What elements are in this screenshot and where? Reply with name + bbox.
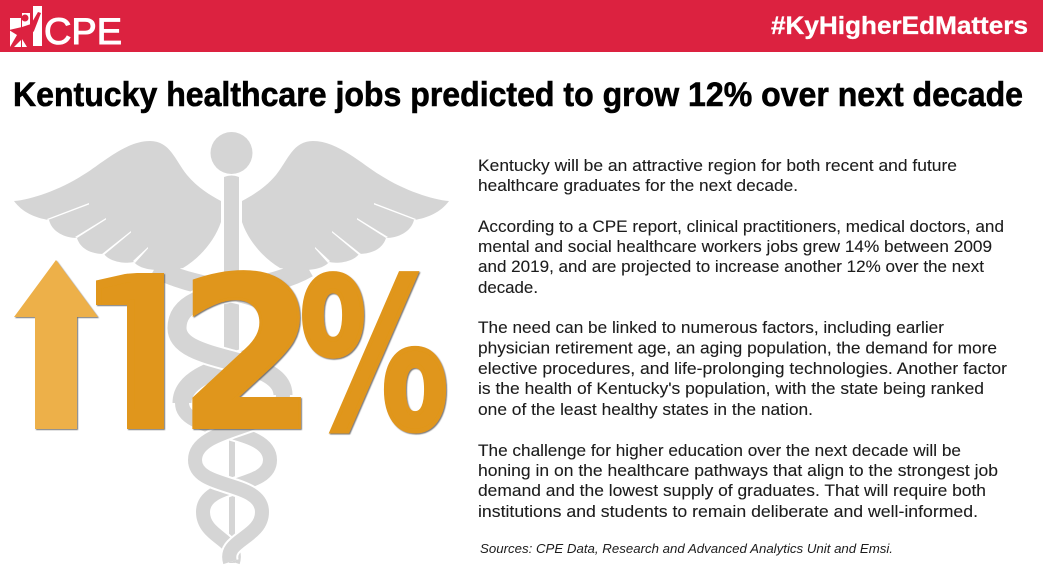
logo: CPE xyxy=(9,6,122,52)
paragraph 3: one of the least healthy states in the nation. xyxy=(478,401,813,419)
arrow: up xyxy=(14,260,98,429)
left wing xyxy=(14,141,221,270)
hashtag: #KyHigherEdMatters xyxy=(771,12,1028,40)
paragraph 4: The challenge for higher education over the next decade will be xyxy=(478,442,961,460)
paragraph 3 xyxy=(478,319,1008,419)
logo wordmark: CPE xyxy=(44,11,122,52)
right wing xyxy=(242,141,449,270)
paragraph 4: institutions and students to remain deliberate and well-informed. xyxy=(478,503,978,521)
icon: caduceus xyxy=(14,132,449,563)
snakes xyxy=(155,268,308,562)
paragraph 2 xyxy=(478,218,1004,297)
icon: logo columns with figure xyxy=(9,6,42,47)
paragraph 1: Kentucky will be an attractive region for both recent and future xyxy=(478,157,957,175)
paragraph 1: healthcare graduates for the next decade. xyxy=(478,177,798,195)
paragraph 2: decade. xyxy=(478,279,538,297)
paragraph 3: physician retirement age, an aging population, the demand for more xyxy=(478,340,997,358)
paragraph 3: is the health of Kentucky's population, with the state being ranked xyxy=(478,380,984,398)
paragraph 4: demand and the lowest supply of graduates. That will require both xyxy=(478,482,986,500)
header banner xyxy=(0,0,1043,52)
staff xyxy=(224,176,239,563)
big number: 12%: % xyxy=(299,235,449,477)
paragraph 1 xyxy=(478,157,957,195)
big number: 12%: 1 xyxy=(75,236,211,483)
sources note: Sources: CPE Data, Research and Advanced Analytics Unit and Emsi. xyxy=(480,542,893,556)
big number: 12% xyxy=(96,270,448,436)
paragraph 2: and 2019, and are projected to increase another 12% over the next xyxy=(478,258,984,276)
orb xyxy=(210,132,252,174)
paragraph 4 xyxy=(478,442,998,521)
paragraph 2: mental and social healthcare workers jobs grew 14% between 2009 xyxy=(478,238,992,256)
big number: 12%: 2 xyxy=(178,234,317,478)
paragraph 3: elective procedures, and life-prolonging technologies. Another factor xyxy=(478,360,1008,378)
paragraph 2: According to a CPE report, clinical practitioners, medical doctors, and xyxy=(478,218,1004,236)
paragraph 3: The need can be linked to numerous factors, including earlier xyxy=(478,319,945,337)
paragraph 4: honing in on the healthcare pathways that align to the strongest job xyxy=(478,462,998,480)
